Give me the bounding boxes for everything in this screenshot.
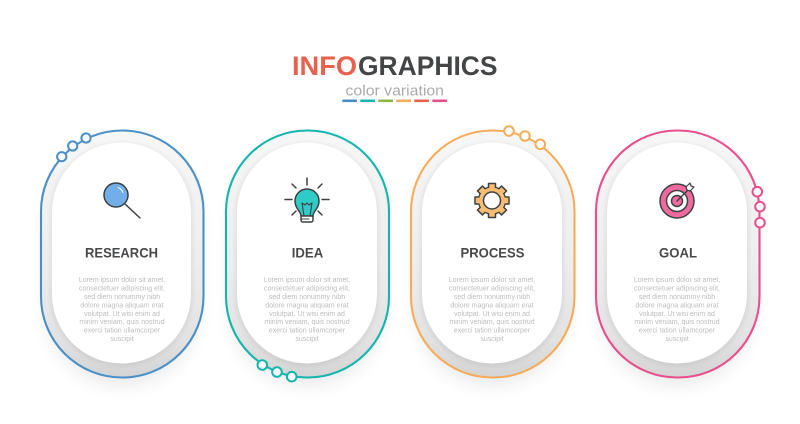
icon: gear (475, 184, 509, 218)
icon: light bulb (285, 178, 329, 222)
heading: IDEA (292, 244, 323, 260)
body text: sed diem nonummy nibh (269, 294, 345, 301)
title: GRAPHICS (358, 51, 498, 81)
body text: volutpat. Ut wisi enim ad (639, 311, 715, 318)
body text: Lorem ipsum dolor sit amet, (634, 277, 720, 284)
body text (264, 277, 350, 343)
icon: magnifying glass (104, 183, 140, 218)
panel: idea (226, 130, 389, 386)
panel: process (411, 126, 574, 386)
body text (634, 277, 720, 343)
step dots (57, 133, 91, 161)
body text: dolore magna aliquam erat (265, 302, 349, 310)
subtitle: color variation (346, 82, 444, 100)
body text: suscipit (295, 336, 319, 343)
panel: goal (596, 130, 765, 386)
panel: research (41, 130, 204, 386)
body text: minim veniam, quis nostrud (79, 319, 165, 326)
body text: exerci tation ullamcorper (84, 328, 161, 334)
body text: consectetuer adipiscing elit, (449, 286, 535, 292)
heading: PROCESS (460, 244, 524, 260)
outline ring (411, 130, 574, 378)
body text: suscipit (665, 336, 689, 343)
body text: volutpat. Ut wisi enim ad (84, 311, 160, 318)
heading: RESEARCH (85, 244, 158, 260)
body text: volutpat. Ut wisi enim ad (269, 311, 345, 318)
body text: exerci tation ullamcorper (269, 328, 346, 334)
body text: dolore magna aliquam erat (80, 302, 164, 310)
body text: consectetuer adipiscing elit, (79, 286, 165, 292)
body text: consectetuer adipiscing elit, (634, 286, 720, 292)
body text: dolore magna aliquam erat (450, 302, 534, 310)
title (292, 51, 498, 81)
body text: volutpat. Ut wisi enim ad (454, 311, 530, 318)
step dots (258, 360, 297, 382)
body text (79, 277, 165, 343)
body text: consectetuer adipiscing elit, (264, 286, 350, 292)
body text: Lorem ipsum dolor sit amet, (264, 277, 350, 284)
body text: minim veniam, quis nostrud (264, 319, 350, 326)
heading: GOAL (659, 244, 697, 260)
icon: target (660, 183, 694, 218)
body text (449, 277, 535, 343)
body text: dolore magna aliquam erat (635, 302, 719, 310)
body text: minim veniam, quis nostrud (449, 319, 535, 326)
body text: sed diem nonummy nibh (639, 294, 715, 301)
body text: exerci tation ullamcorper (639, 328, 716, 334)
body text: suscipit (110, 336, 134, 343)
body text: exerci tation ullamcorper (454, 328, 531, 334)
title: INFO (292, 51, 357, 81)
body text: sed diem nonummy nibh (454, 294, 530, 301)
step dots (752, 187, 765, 228)
colour legend dashes (342, 100, 447, 102)
body text: Lorem ipsum dolor sit amet, (79, 277, 165, 284)
body text: suscipit (480, 336, 504, 343)
outline ring (226, 130, 389, 378)
outline ring (41, 130, 204, 378)
body text: minim veniam, quis nostrud (634, 319, 720, 326)
body text: Lorem ipsum dolor sit amet, (449, 277, 535, 284)
step dots (504, 126, 545, 149)
outline ring (596, 130, 760, 378)
body text: sed diem nonummy nibh (84, 294, 160, 301)
